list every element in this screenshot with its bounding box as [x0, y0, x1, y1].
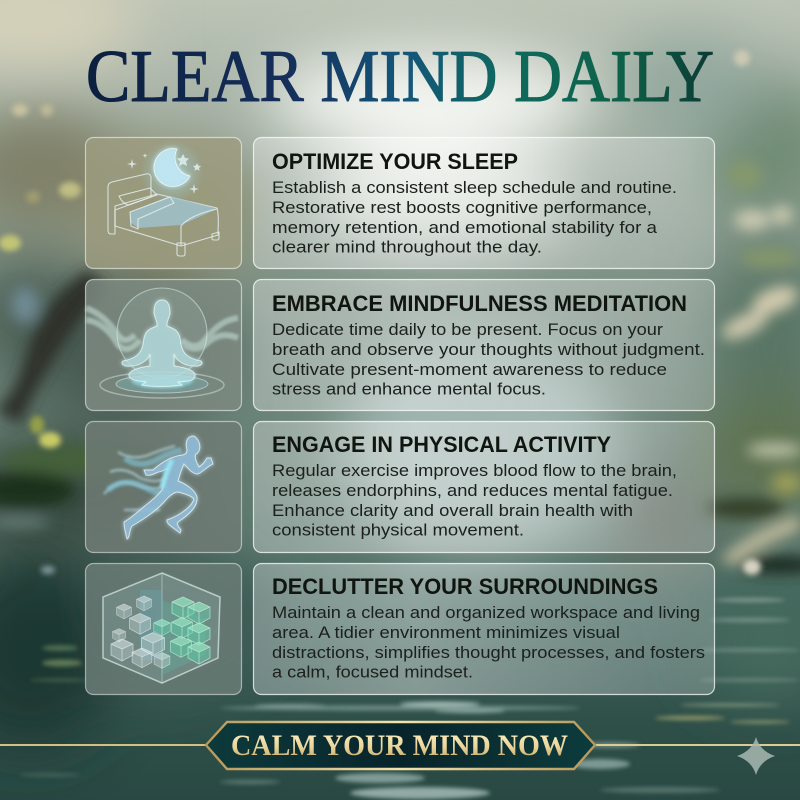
text card: declutter — [254, 564, 714, 694]
heading: ENGAGE IN PHYSICAL ACTIVITY — [272, 432, 611, 457]
body text: a calm, focused mindset. — [272, 662, 473, 682]
heading: DECLUTTER YOUR SURROUNDINGS — [272, 574, 658, 599]
banner text: CALM YOUR MIND NOW — [231, 729, 568, 762]
body text: memory retention, and emotional stability for a — [272, 218, 658, 237]
body text — [272, 178, 677, 256]
title: CLEAR MIND DAILY — [86, 36, 714, 118]
heading: EMBRACE MINDFULNESS MEDITATION — [272, 291, 687, 316]
icon card: declutter — [86, 564, 242, 694]
panel: engage in physical activity — [86, 422, 714, 552]
text card: sleep — [254, 138, 714, 268]
body text: distractions, simplifies thought processes, and fosters — [272, 643, 705, 662]
text card: activity — [254, 422, 714, 552]
text card: meditation — [254, 280, 714, 410]
panel: declutter your surroundings — [86, 564, 714, 694]
icon card: meditation — [86, 280, 242, 410]
body text: clearer mind throughout the day. — [272, 238, 542, 256]
icon: running figure — [104, 436, 213, 539]
body text: stress and enhance mental focus. — [272, 380, 546, 398]
icon: bed with moon and stars — [108, 140, 219, 256]
body text: releases endorphins, and reduces mental fatigue. — [272, 481, 673, 500]
heading: OPTIMIZE YOUR SLEEP — [272, 149, 518, 174]
body text: Establish a consistent sleep schedule and routine. — [272, 178, 677, 197]
body text: Maintain a clean and organized workspace and living — [272, 603, 700, 622]
body text: Enhance clarity and overall brain health with — [272, 501, 633, 520]
body text: Dedicate time daily to be present. Focus on your — [272, 320, 663, 339]
icon: glass box of cubes — [103, 573, 220, 683]
icon card: activity — [86, 422, 242, 552]
body text — [272, 603, 705, 682]
icon: meditating figure in sphere — [86, 288, 238, 398]
body text: area. A tidier environment minimizes visual — [272, 623, 620, 642]
call to action banner — [0, 722, 800, 769]
body text: Regular exercise improves blood flow to the brain, — [272, 461, 677, 480]
body text: consistent physical movement. — [272, 520, 524, 540]
body text: Restorative rest boosts cognitive performance, — [272, 198, 652, 217]
body text: breath and observe your thoughts without judgment. — [272, 340, 705, 359]
panel: optimize your sleep — [86, 138, 714, 268]
icon card: sleep — [86, 138, 242, 268]
body text — [272, 320, 705, 398]
body text: Cultivate present-moment awareness to reduce — [272, 360, 667, 379]
body text — [272, 461, 677, 540]
panel: embrace mindfulness meditation — [86, 280, 714, 410]
icon: sparkle — [737, 737, 775, 775]
